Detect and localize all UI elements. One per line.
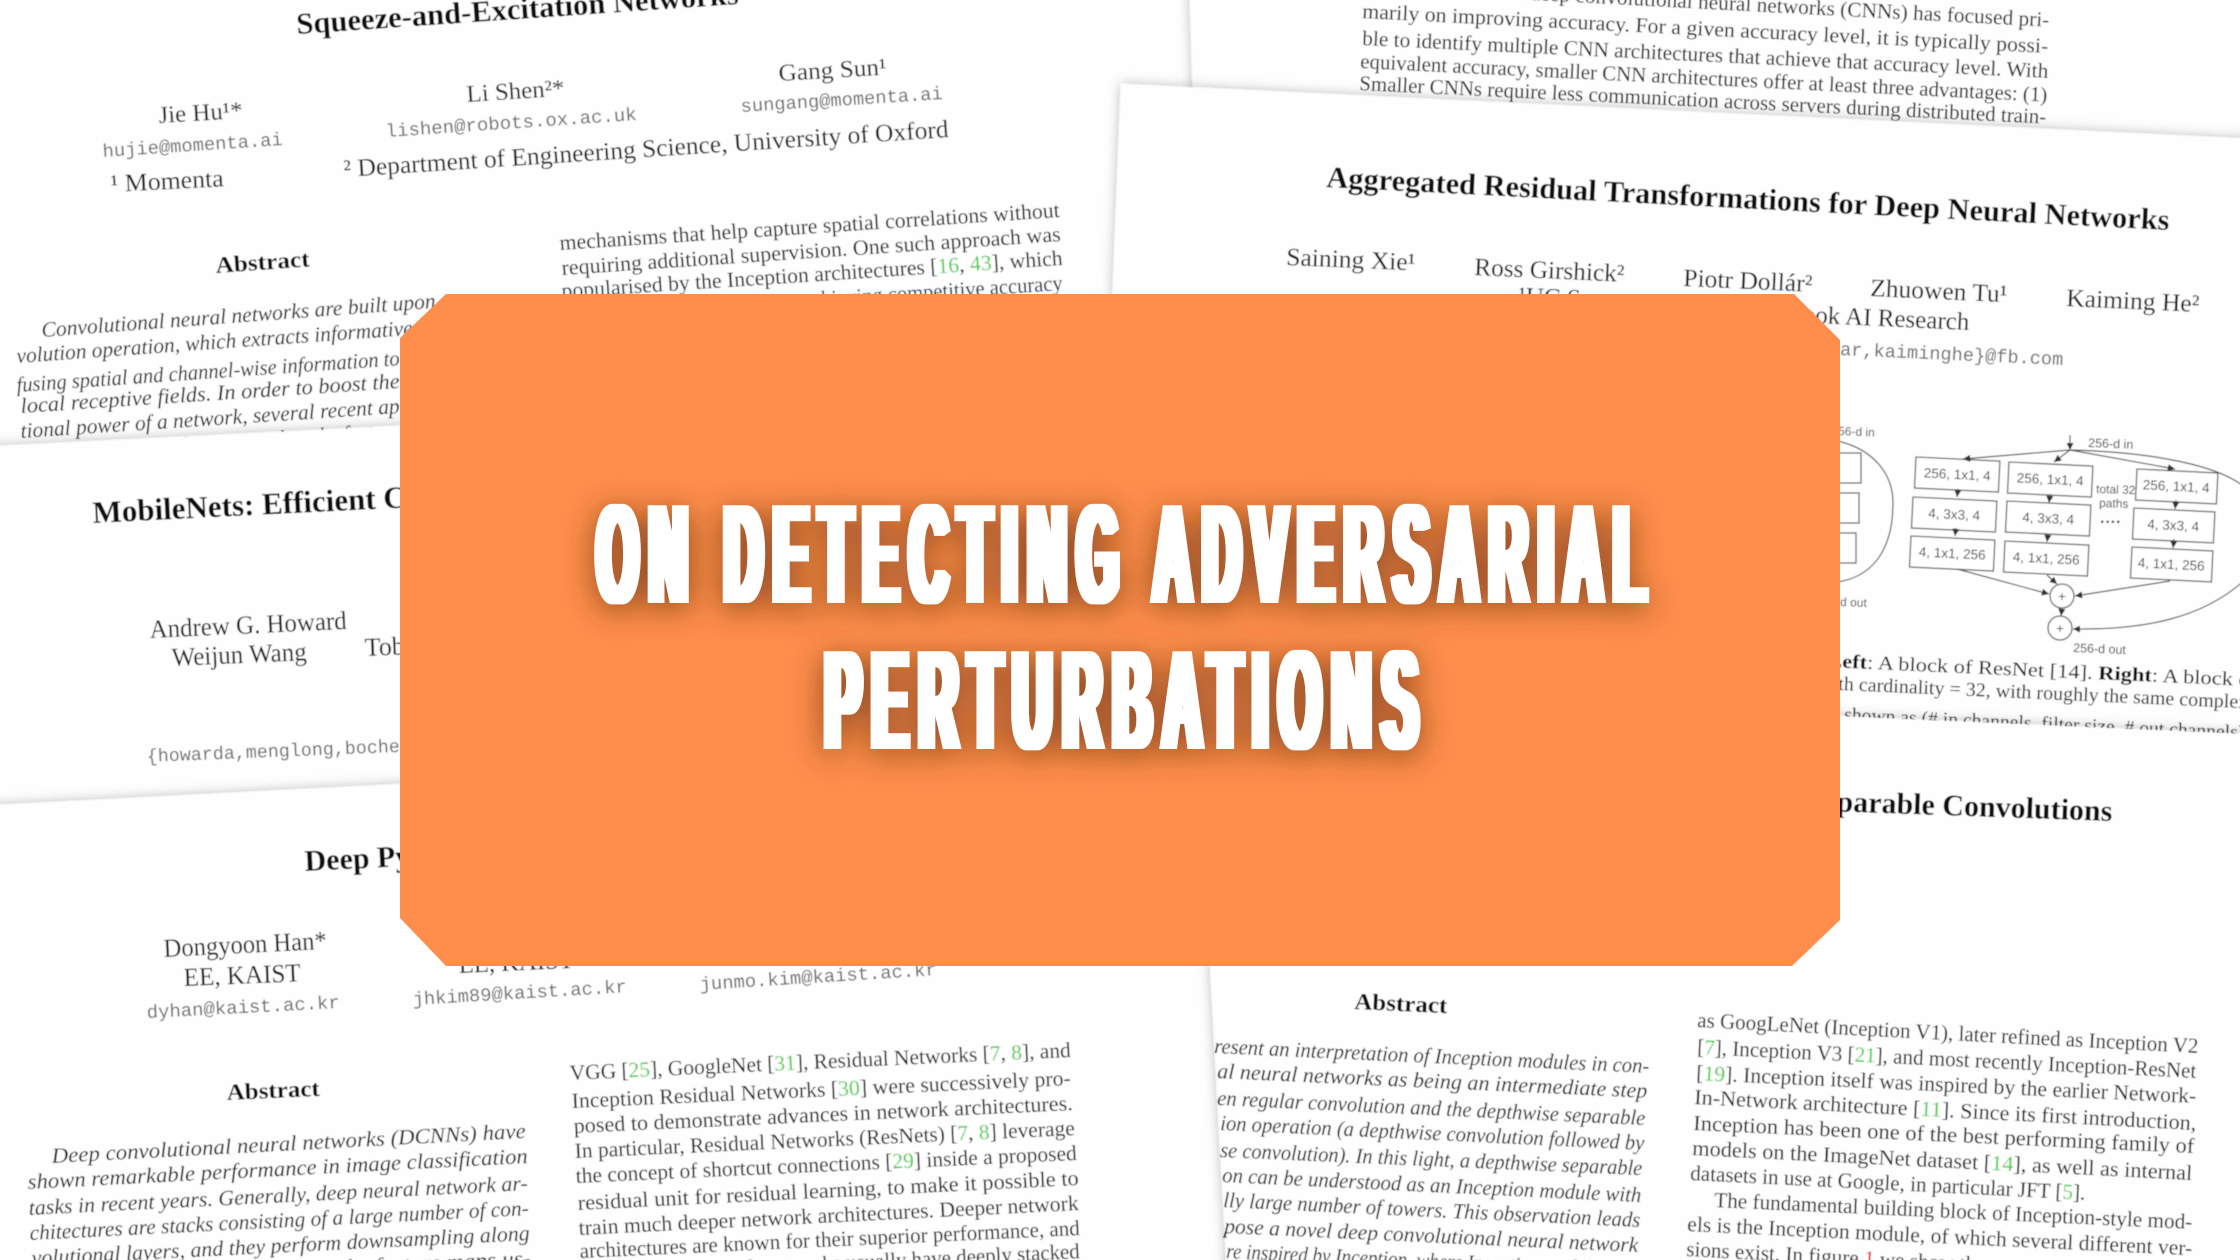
authors block: sungang@momenta.ai	[740, 84, 943, 118]
authors block: Piotr Dollár²	[1683, 265, 1813, 298]
chart: ResNeXt block diagram (right): 4, 3x3, 4	[2022, 510, 2075, 527]
text block: introduction: marily on improving accuracy. For a given accuracy level, it is typically possi-	[1362, 0, 2049, 58]
text block: introduction: ble to identify multiple CNN architectures that achieve that accuracy level. With	[1362, 26, 2049, 83]
text block: right column: In-Network architecture [ 11]. Since its first introduction,	[1694, 1085, 2197, 1135]
chart: ResNeXt block diagram (right): 4, 3x3, 4	[2147, 517, 2200, 534]
heading: paper title: Aggregated Residual Transformations for Deep Neural Networks	[1326, 161, 2170, 237]
authors block: ¹ Momenta	[110, 165, 224, 198]
authors block: Dongyoon Han*	[163, 926, 327, 963]
text block: abstract body: lly large number of towers. This observation leads	[1223, 1188, 1641, 1232]
text block: right column: using multi-branch modules, achieving competitive accuracy	[562, 271, 1064, 328]
text block: abstract body	[16, 289, 436, 468]
text block: right column: residual unit for residual learning, to make it possible to	[577, 1166, 1079, 1215]
text block: right column	[1686, 1008, 2199, 1260]
text block: abstract body: chitectures are stacks consisting of a large number of con-	[29, 1196, 529, 1245]
chart: ResNeXt block diagram (right): +	[2056, 620, 2064, 636]
text block: figure caption	[1818, 651, 2240, 744]
chart: ResNeXt block diagram (right): +	[2058, 588, 2066, 604]
sheet	[0, 0, 1205, 447]
text block: right column: the concept of shortcut connections [29] inside a proposed	[575, 1141, 1077, 1188]
text block: right column: as GoogLeNet (Inception V1), later refined as Inception V2	[1697, 1008, 2199, 1058]
text block: right column: Inception has been one of the best performing family of	[1693, 1111, 2196, 1158]
authors block: junmo.kim@kaist.ac.kr	[699, 960, 937, 996]
authors block: dyhan@kaist.ac.kr	[146, 993, 340, 1024]
text block: abstract body	[1214, 1034, 1650, 1260]
text block: right column: The fundamental building block of Inception-style mod-	[1714, 1188, 2193, 1234]
chart: ResNeXt block diagram (right)	[1909, 435, 2240, 657]
text block: abstract body	[27, 1119, 531, 1260]
panel: Aggregated Residual Transformations paper	[1095, 84, 2240, 780]
text block: figure caption: Left: A block of ResNet [14]. Right : A block of	[1827, 651, 2240, 691]
chart: ResNeXt block diagram (right): 4, 1x1, 256	[2137, 555, 2205, 574]
text block: abstract body: fusing spatial and channel-wise information to	[16, 346, 401, 397]
text block: abstract body: shown remarkable performance in image classification	[27, 1144, 528, 1194]
sheet	[0, 740, 1250, 1260]
title	[597, 475, 1657, 780]
chart: ResNet block diagram (left, partly hidden): 56-d in	[1838, 424, 1875, 439]
chart: ResNeXt block diagram (right): 256, 1x1, 4	[2142, 477, 2210, 496]
chart: ResNeXt block diagram (right): 4, 1x1, 256	[1918, 544, 1986, 563]
panel: Deep Pyramidal paper	[0, 740, 1250, 1260]
chart: ResNeXt block diagram (right): ····	[2100, 514, 2121, 531]
panel: orange title banner	[400, 294, 1840, 966]
text block: abstract body: en regular convolution and the depthwise separable	[1217, 1086, 1646, 1130]
authors block: ² Department of Engineering Science, University of Oxford	[343, 116, 950, 183]
authors block: Ross Girshick²	[1474, 254, 1625, 288]
text block: right column: [7], Inception V3 [21], and most recently Inception-ResNet	[1697, 1035, 2197, 1083]
authors block: {pdollar,kaiminghe}@fb.com	[1773, 337, 2064, 371]
chart: ResNeXt block diagram (right): 4, 3x3, 4	[1928, 506, 1981, 523]
chart: ResNeXt block diagram (right): 256, 1x1, 4	[2016, 470, 2084, 489]
text block: right column: popularised by the Inception architectures [16, 43], which	[561, 246, 1064, 303]
text block: right column	[559, 198, 1064, 328]
heading: abstract: Abstract	[1354, 988, 1448, 1018]
panel: Squeeze-and-Excitation paper	[0, 0, 1205, 468]
authors block: Andrew G. Howard	[149, 606, 347, 644]
authors block: EE, KAIST	[183, 958, 301, 992]
text block: abstract body: tasks in recent years. Generally, deep neural network ar-	[28, 1171, 528, 1220]
heading: abstract: Abstract	[215, 245, 311, 278]
chart: ResNeXt block diagram (right): paths	[2099, 496, 2129, 511]
chart: ResNeXt block diagram (right): total 32	[2096, 482, 2136, 497]
text block: abstract body: al neural networks as being an intermediate step	[1217, 1059, 1648, 1103]
text block: introduction: Smaller CNNs require less communication across servers during distributed train-	[1359, 71, 2047, 129]
text block: right column: datasets in use at Google, in particular JFT [5].	[1690, 1161, 2086, 1205]
text block: right column: Inception Residual Networks [30] were successively pro-	[571, 1066, 1071, 1113]
authors block: hujie@momenta.ai	[102, 130, 283, 163]
chart: ResNet block diagram (left, partly hidden)	[1800, 424, 1893, 610]
text block: figure caption: is shown as (# in channels, filter size, # out channels)	[1826, 704, 2240, 744]
text block: right column: els is the Inception module, of which several different ver-	[1687, 1212, 2193, 1260]
text block: abstract body: local receptive fields. In order to boost the	[20, 369, 401, 418]
text block: right column: VGG [25], GoogleNet [31], Residual Networks [7, 8], and	[569, 1038, 1071, 1085]
heading: paper title: Deep Pyramidal Residual Networks	[304, 822, 762, 878]
authors block: Jie Hu¹*	[158, 98, 243, 129]
panel: MobileNets paper	[0, 385, 1210, 825]
authors block: Tobias Weyand	[364, 627, 525, 662]
sheet	[1195, 688, 2240, 1260]
authors block: jhkim89@kaist.ac.kr	[412, 977, 627, 1011]
text block: introduction: equivalent accuracy, smaller CNN architectures offer at least three advantages: (1)	[1360, 49, 2048, 107]
authors block: ¹UC S	[1518, 283, 1581, 313]
authors block: Weijun Wang	[171, 637, 307, 672]
authors block: Saining Xie¹	[1286, 244, 1416, 276]
authors block: {howarda,menglong,boche	[146, 737, 400, 768]
sheet	[0, 385, 1210, 825]
sheet	[1189, 0, 2240, 220]
text block: right column: requiring additional supervision. One such approach was	[561, 222, 1061, 280]
authors block: Gang Sun¹	[778, 55, 887, 87]
text block: abstract body: tional power of a network, several recent ap	[20, 394, 401, 443]
text block: introduction	[1359, 0, 2050, 129]
panel: SqueezeNet paper	[1189, 0, 2240, 220]
text block: figure caption: with cardinality = 32, with roughly the same complex	[1818, 673, 2240, 713]
panel: Xception paper	[1195, 688, 2240, 1260]
authors block	[102, 55, 950, 198]
authors block: Kaiming He²	[2066, 285, 2200, 318]
chart: ResNeXt block diagram (right): 256, 1x1, 4	[1923, 465, 1991, 484]
chart: ResNet block diagram (left, partly hidden): d out	[1840, 595, 1868, 610]
authors block: lishen@robots.ox.ac.uk	[385, 105, 637, 143]
text block: abstract body: resent an interpretation of Inception modules in con-	[1214, 1034, 1650, 1078]
authors block: EE, KAIST	[458, 945, 574, 979]
text block: right column: [19]. Inception itself was inspired by the earlier Network-	[1696, 1061, 2197, 1108]
chart: ResNeXt block diagram (right): 4, 1x1, 256	[2012, 549, 2080, 568]
text block: abstract body: pose a novel deep convolutional neural network	[1222, 1214, 1639, 1257]
text block: right column: posed to demonstrate advances in network architectures.	[573, 1091, 1073, 1138]
authors block	[1286, 244, 2200, 371]
authors block	[146, 606, 525, 768]
text block: abstract body: se convolution). In this light, a depthwise separable	[1220, 1138, 1643, 1180]
authors block	[146, 926, 937, 1024]
text block: abstract body: Deep convolutional neural networks (DCNNs) have	[50, 1119, 527, 1168]
authors block: ²Facebook AI Research	[1735, 299, 1970, 336]
heading: paper title: Xception: Deep Learning with Depthwise Separable Convolutions	[1271, 766, 2113, 828]
text block: right column: models on the ImageNet dataset [ 14], as well as internal	[1692, 1136, 2193, 1185]
text block: abstract body: on can be understood as an Inception module with	[1222, 1163, 1642, 1207]
sheet	[1095, 84, 2240, 780]
text block: right column: In particular, Residual Networks (ResNets) [7, 8] leverage	[574, 1116, 1075, 1163]
chart: ResNeXt block diagram (right): 256-d in	[2088, 436, 2134, 452]
heading: abstract: Abstract	[226, 1075, 321, 1105]
text block: abstract body: proaches have sought to strengthen the feature	[21, 418, 401, 468]
text block: abstract body: volution operation, which extracts informative	[16, 316, 414, 368]
heading: paper title: MobileNets: Efficient Convolutional	[92, 471, 572, 530]
text block: right column: train much deeper network architectures. Deeper network	[578, 1191, 1079, 1240]
text block: abstract body: ion operation (a depthwise convolution followed by	[1220, 1111, 1645, 1155]
text block: right column: mechanisms that help capture spatial correlations without	[559, 198, 1060, 255]
authors block: Zhuowen Tu¹	[1870, 275, 2008, 308]
chart: ResNeXt block diagram (right): 256-d out	[2073, 641, 2127, 657]
authors block: Li Shen²*	[466, 76, 565, 108]
text block: right column	[569, 1038, 1080, 1260]
text block: abstract body: Convolutional neural networks are built upon	[41, 289, 436, 342]
